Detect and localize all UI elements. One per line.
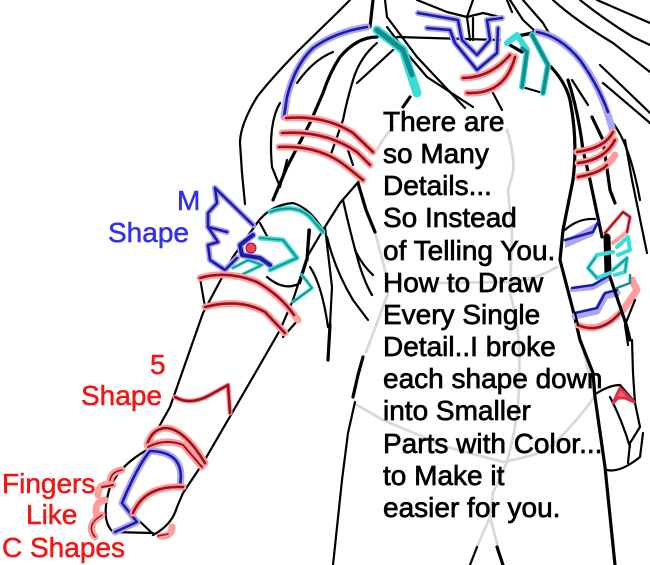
label: M Shape bbox=[108, 185, 200, 248]
red right arm bands bbox=[577, 132, 615, 177]
main explanatory text: of Telling You. bbox=[383, 235, 555, 266]
black outline: left arm bbox=[106, 180, 360, 535]
main explanatory text: each shape down bbox=[383, 363, 603, 394]
red elbow band bbox=[200, 275, 298, 333]
red hand and C-shaped fingers bbox=[91, 470, 183, 537]
label: Fingers Like C Shapes bbox=[2, 468, 125, 563]
label: 5 Shape: Shape bbox=[81, 380, 162, 411]
black outline: neck and collar bbox=[370, 0, 553, 110]
main explanatory text: so Many bbox=[383, 138, 489, 169]
red left arm bands bbox=[279, 118, 373, 180]
red collar curves bbox=[463, 55, 515, 93]
label: Fingers Like C Shapes: Fingers bbox=[2, 468, 95, 499]
label: M Shape: Shape bbox=[108, 217, 189, 248]
main explanatory text: So Instead bbox=[383, 202, 517, 233]
teal shoulder straps bbox=[377, 30, 548, 93]
main explanatory text bbox=[383, 106, 603, 523]
main explanatory text: Detail..I broke bbox=[383, 331, 556, 362]
main explanatory text: easier for you. bbox=[383, 492, 560, 523]
label: 5 Shape: 5 bbox=[150, 349, 166, 380]
teal armour pieces on the left arm bbox=[233, 208, 323, 302]
label: M Shape: M bbox=[177, 185, 200, 216]
black outline: hair and left side of body bbox=[240, 0, 503, 565]
main explanatory text: Every Single bbox=[383, 299, 540, 330]
red hip accent bbox=[613, 388, 634, 403]
right forearm armour bbox=[565, 212, 637, 345]
gray construction lines of the torso bbox=[357, 127, 597, 547]
red 5-shaped forearm mark bbox=[175, 385, 230, 413]
main explanatory text: Parts with Color... bbox=[383, 428, 602, 459]
label: 5 Shape bbox=[81, 349, 166, 411]
red gem on the wing bbox=[246, 243, 256, 253]
label: Fingers Like C Shapes: C Shapes bbox=[2, 532, 125, 563]
main explanatory text: How to Draw bbox=[383, 267, 544, 298]
main explanatory text: to Make it bbox=[383, 460, 505, 491]
blue shoulder outlines bbox=[284, 27, 612, 128]
blue collar shapes bbox=[418, 13, 502, 70]
red wrist bands bbox=[147, 428, 205, 467]
main explanatory text: Details... bbox=[383, 170, 492, 201]
black outline: right hair and body bbox=[547, 0, 650, 565]
label: Fingers Like C Shapes: Like bbox=[26, 499, 77, 530]
main explanatory text: There are bbox=[383, 106, 504, 137]
main explanatory text: into Smaller bbox=[383, 395, 531, 426]
blue hand outline bbox=[115, 451, 181, 532]
icon: M-shaped wing bbox=[208, 188, 270, 270]
